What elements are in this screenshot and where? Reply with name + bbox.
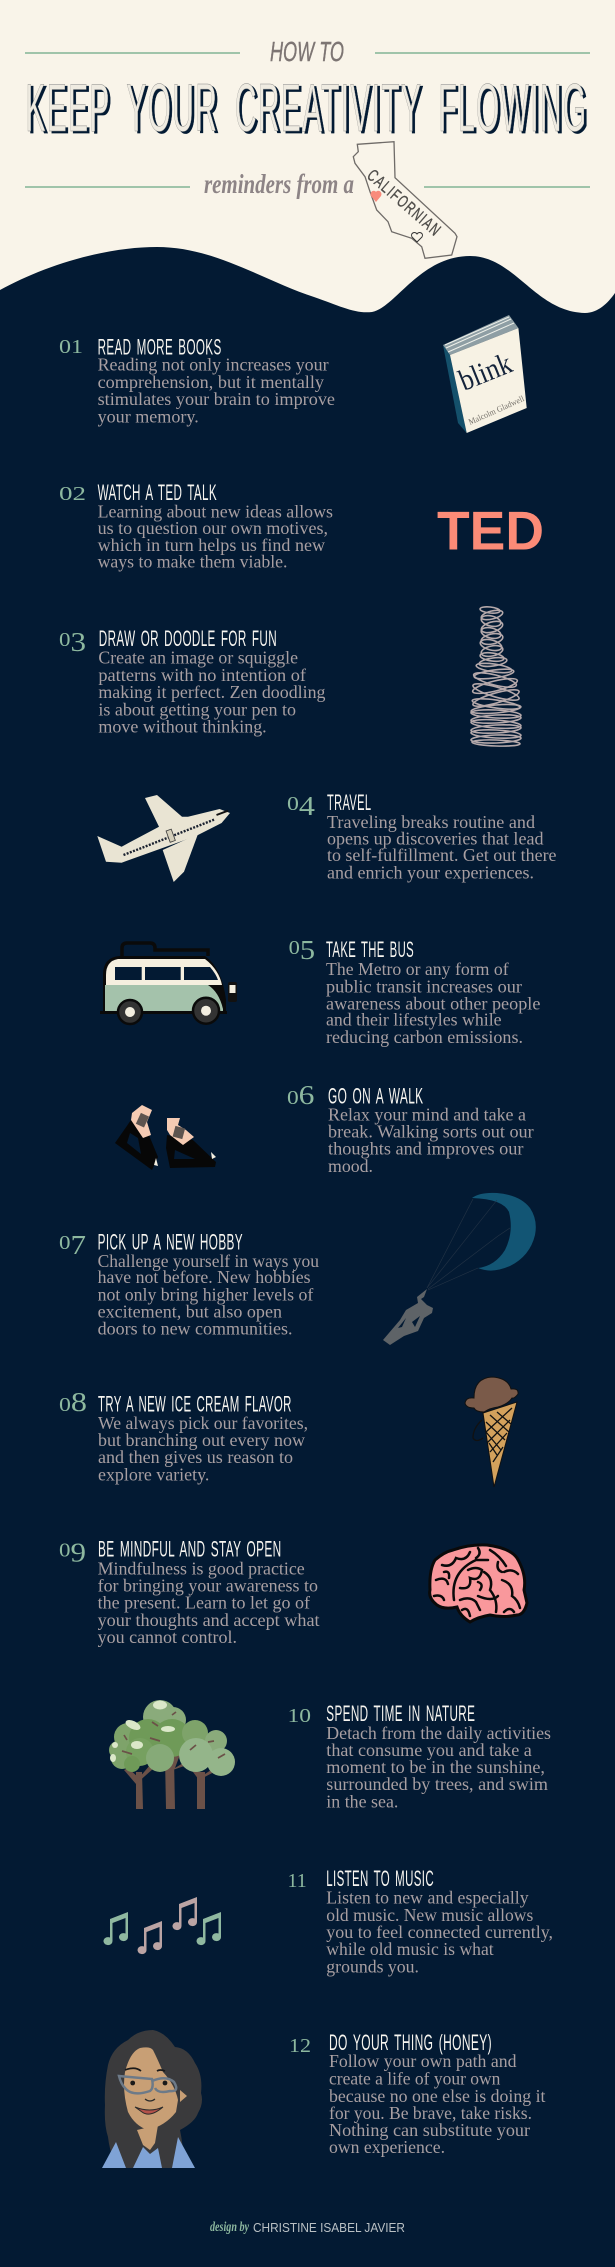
heading: DRAW OR DOODLE FOR FUN (99, 626, 277, 651)
item 11 (288, 1866, 553, 1976)
item 07 (59, 1229, 319, 1339)
icon: portrait of designer (102, 2030, 202, 2168)
eyebrow: how to: HOW TO (270, 36, 344, 67)
subtitle: reminders from a (204, 169, 354, 199)
body: your thoughts and accept what (98, 1610, 320, 1630)
body: comprehension, but it mentally (98, 372, 324, 392)
number 03: 0 (59, 629, 70, 651)
body (98, 1413, 308, 1484)
heading: TRY A NEW ICE CREAM FLAVOR (98, 1391, 292, 1416)
body: while old music is what (326, 1939, 494, 1959)
number 09: 0 (59, 1540, 70, 1562)
item 05 (289, 935, 541, 1047)
heading: GO ON A WALK (328, 1084, 424, 1109)
body: Nothing can substitute your (329, 2120, 530, 2140)
item 10 (288, 1701, 551, 1812)
body: moment to be in the sunshine, (326, 1757, 545, 1777)
body (98, 1251, 319, 1339)
body (98, 501, 333, 572)
body (98, 355, 335, 426)
heading: PICK UP A NEW HOBBY (98, 1229, 243, 1254)
body: thoughts and improves our (328, 1139, 524, 1159)
body: break. Walking sorts out our (328, 1122, 534, 1142)
number 07: 7 (70, 1230, 86, 1260)
body: the present. Learn to let go of (98, 1593, 310, 1613)
number 06: 06 (287, 1080, 314, 1110)
body (328, 1105, 534, 1176)
number 03: 3 (70, 627, 86, 657)
item 03 (59, 626, 326, 736)
icon: scribbled bottle (471, 606, 521, 747)
icon: blink book: Malcolm Gladwell (467, 393, 526, 427)
body: stimulates your brain to improve (98, 389, 335, 409)
body: Relax your mind and take a (328, 1105, 526, 1125)
body: reducing carbon emissions. (326, 1027, 523, 1047)
number 11: 11 (288, 1870, 307, 1892)
heading: TAKE THE BUS (326, 937, 414, 962)
number 04: 4 (299, 791, 316, 821)
body: We always pick our favorites, (98, 1413, 308, 1433)
number 08: 08 (59, 1387, 87, 1417)
body: Detach from the daily activities (326, 1723, 551, 1743)
body: for you. Be brave, take risks. (329, 2103, 532, 2123)
icon: ice cream cone (465, 1377, 518, 1487)
body: Challenge yourself in ways you (98, 1251, 319, 1271)
body: and then gives us reason to (98, 1447, 293, 1467)
body: ways to make them viable. (98, 552, 287, 572)
number 04: 0 (287, 793, 299, 815)
item 06 (287, 1080, 534, 1176)
body: that consume you and take a (326, 1740, 532, 1760)
body: public transit increases our (326, 976, 522, 996)
heading: BE MINDFUL AND STAY OPEN (98, 1537, 282, 1562)
body: not only bring higher levels of (98, 1285, 313, 1305)
heading: LISTEN TO MUSIC (326, 1866, 434, 1891)
body (329, 2051, 546, 2157)
body: Mindfulness is good practice (98, 1559, 305, 1579)
body: old music. New music allows (326, 1905, 533, 1925)
heading: TRAVEL (327, 790, 371, 815)
footer credit: CHRISTINE ISABEL JAVIER (253, 2221, 405, 2235)
number 12: 12 (289, 2035, 311, 2057)
icon: brain (430, 1545, 527, 1622)
item 12 (289, 2030, 546, 2157)
item 02 (59, 480, 333, 572)
item 09 (59, 1537, 320, 1647)
body: for bringing your awareness to (98, 1576, 318, 1596)
footer credit (210, 2220, 405, 2235)
body: The Metro or any form of (326, 959, 509, 979)
body: making it perfect. Zen doodling (98, 682, 326, 702)
icon: California map (353, 142, 457, 258)
icon: kitesurfer (383, 1193, 536, 1345)
body: us to question our own motives, (98, 518, 328, 538)
body: Create an image or squiggle (98, 648, 298, 668)
body: and enrich your experiences. (327, 862, 534, 882)
body (326, 1888, 553, 1976)
body: Listen to new and especially (326, 1888, 529, 1908)
icon: TED logo: TED (437, 499, 544, 561)
body: because no one else is doing it (329, 2086, 546, 2106)
icon: camper van (100, 943, 237, 1024)
body (326, 959, 541, 1047)
icon: California map: CALIFORNIAN (363, 166, 445, 240)
number 07: 0 (59, 1232, 70, 1254)
body: grounds you. (326, 1956, 419, 1976)
icon: trees (109, 1700, 235, 1809)
icon: blink book (443, 315, 527, 433)
body: own experience. (329, 2137, 445, 2157)
body: move without thinking. (98, 716, 267, 736)
body: your memory. (98, 406, 199, 426)
body (98, 1559, 320, 1647)
heading: READ MORE BOOKS (98, 334, 222, 359)
body (327, 812, 557, 882)
body: but branching out every now (98, 1430, 305, 1450)
number 05: 0 (289, 937, 300, 959)
icon: airplane (97, 795, 230, 882)
heading: WATCH A TED TALK (98, 480, 217, 505)
body: awareness about other people (326, 994, 541, 1014)
number 10: 10 (288, 1705, 311, 1727)
number 02: 02 (59, 483, 86, 505)
header background (0, 0, 615, 340)
body: have not before. New hobbies (98, 1267, 311, 1287)
body: you cannot control. (98, 1627, 237, 1647)
icon: walking feet (115, 1105, 216, 1170)
item 01 (59, 334, 335, 426)
item 08 (59, 1387, 308, 1484)
body: Learning about new ideas allows (98, 501, 333, 521)
heading: SPEND TIME IN NATURE (326, 1701, 475, 1726)
body: opens up discoveries that lead (327, 829, 544, 849)
body: surrounded by trees, and swim (326, 1774, 548, 1794)
body: create a life of your own (329, 2069, 501, 2089)
icon: music notes (104, 1897, 221, 1954)
body: which in turn helps us find new (98, 535, 325, 555)
body: mood. (328, 1156, 373, 1176)
body: is about getting your pen to (98, 699, 296, 719)
icon: blink book: blink (454, 347, 517, 397)
body: in the sea. (326, 1792, 398, 1812)
body: you to feel connected currently, (326, 1922, 553, 1942)
body: to self-fulfillment. Get out there (327, 845, 557, 865)
body: patterns with no intention of (98, 665, 306, 685)
number 01: 01 (59, 336, 83, 358)
number 05: 5 (300, 935, 315, 965)
body: doors to new communities. (98, 1319, 292, 1339)
number 09: 9 (70, 1538, 86, 1568)
body (98, 648, 326, 736)
body: and their lifestyles while (326, 1010, 502, 1030)
header rule lines (25, 53, 590, 187)
body (326, 1723, 551, 1812)
body: Follow your own path and (329, 2051, 517, 2071)
item 04 (287, 790, 557, 882)
body: Traveling breaks routine and (327, 812, 535, 832)
body: Reading not only increases your (98, 355, 329, 375)
body: explore variety. (98, 1464, 209, 1484)
footer credit: design by (210, 2220, 250, 2235)
body: excitement, but also open (98, 1302, 282, 1322)
